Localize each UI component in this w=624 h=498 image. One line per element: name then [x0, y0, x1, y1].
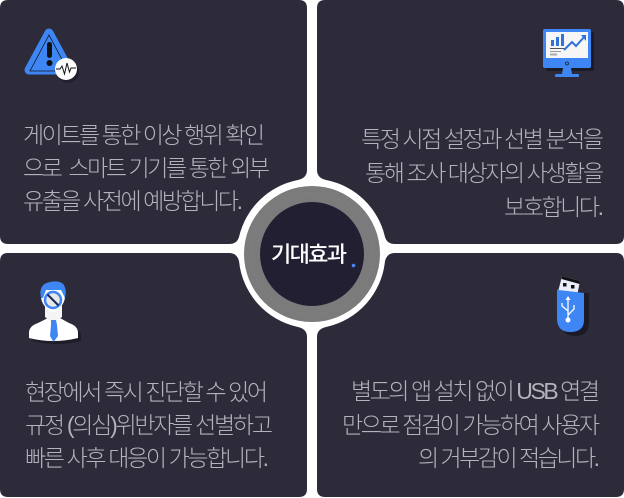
text: bottom right description: 만으로 점검이 가능하여 사용자 — [342, 412, 600, 438]
text: bottom left description: 규정 (의심)위반자를 선별하고 — [25, 412, 273, 438]
icon: warning triangle with pulse — [29, 33, 79, 83]
text: top right description: 통해 조사 대상자의 사생활을 — [365, 160, 604, 186]
text: bottom left description: 빠른 사후 대응이 가능합니다. — [25, 445, 269, 471]
icon: USB stick — [557, 276, 589, 336]
icon: monitor with charts — [543, 29, 594, 77]
text: bottom right description — [342, 378, 600, 471]
text: top left description — [23, 122, 270, 214]
center badge — [244, 186, 380, 322]
icon: person with prohibited face — [29, 281, 81, 344]
panel: top right — [317, 0, 624, 244]
text: top left description: 게이트를 통한 이상 행위 확인 — [23, 122, 265, 148]
text: top left description: 으로 스마트 기기를 통한 외부 — [23, 155, 270, 181]
text: top right description: 보호합니다. — [504, 194, 604, 220]
center dot — [352, 264, 355, 267]
text: bottom right description: 별도의 앱 설치 없이 USB 연결 — [351, 378, 600, 404]
center title: 기대효과 — [271, 242, 347, 267]
panel: top left — [0, 0, 307, 244]
text: top right description — [361, 126, 604, 220]
text: top right description: 특정 시점 설정과 선별 분석을 — [361, 126, 604, 152]
text: top left description: 유출을 사전에 예방합니다. — [23, 188, 243, 214]
text: bottom left description: 현장에서 즉시 진단할 수 있어 — [25, 379, 268, 405]
text: bottom left description — [25, 379, 273, 471]
panel: bottom left — [0, 253, 307, 497]
panel: bottom right — [317, 253, 624, 497]
text: bottom right description: 의 거부감이 적습니다. — [418, 445, 600, 471]
